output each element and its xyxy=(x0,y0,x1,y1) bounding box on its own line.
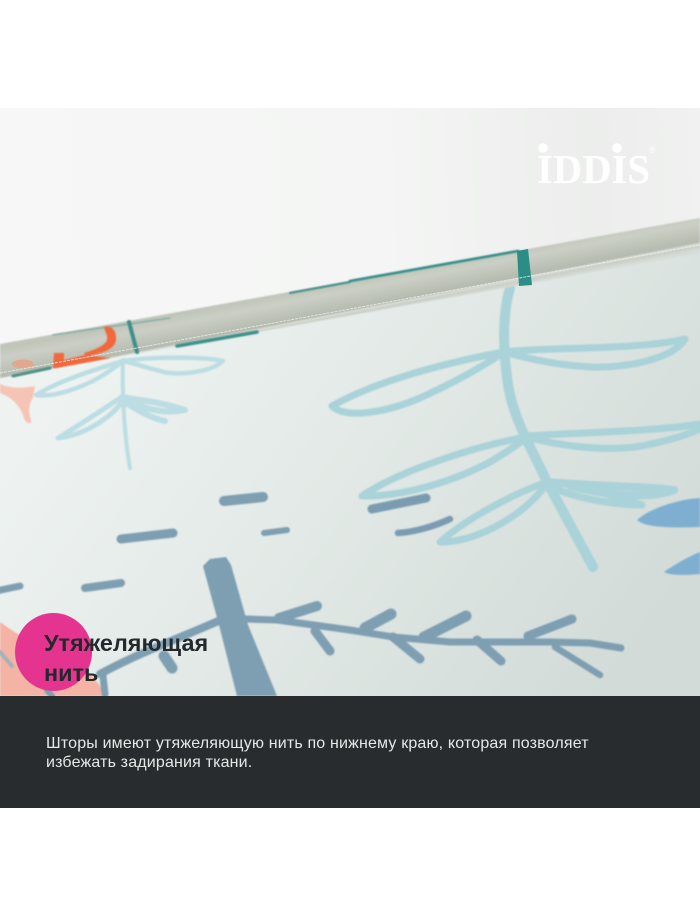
right branch xyxy=(245,606,621,675)
dashes xyxy=(0,497,450,591)
small sprig xyxy=(36,358,223,468)
left branch xyxy=(0,618,225,696)
wall background xyxy=(0,108,700,696)
teal edge stripes xyxy=(13,251,518,376)
large sprig xyxy=(332,288,700,567)
hem roll xyxy=(0,218,700,378)
description band xyxy=(0,696,700,808)
peach flower shape xyxy=(0,384,700,696)
peach spot xyxy=(12,360,34,368)
curtain fabric xyxy=(0,245,700,696)
dark blue tree and dashes xyxy=(0,497,621,696)
IDDIS logo: IDDIS xyxy=(537,146,650,192)
description text xyxy=(46,735,589,771)
stitch line xyxy=(0,245,700,373)
heading xyxy=(44,630,208,686)
description text: избежать задирания ткани. xyxy=(46,754,252,771)
orange motif xyxy=(53,326,116,368)
photo: curtain fabric with weighted hem xyxy=(0,108,700,696)
description text: Шторы имеют утяжеляющую нить по нижнему краю, которая позволяет xyxy=(46,735,589,752)
IDDIS logo: ® xyxy=(649,145,656,155)
heading: нить xyxy=(44,660,98,686)
hem with stitch xyxy=(0,218,700,378)
heading: Утяжеляющая xyxy=(44,630,208,656)
blue blobs at right edge xyxy=(637,498,700,527)
pink petal behind badge xyxy=(0,622,107,696)
teal vertical band xyxy=(517,249,532,286)
magenta circle xyxy=(15,613,92,691)
callout: heading with magenta circle xyxy=(15,613,208,691)
pale teal sprigs xyxy=(36,288,700,567)
tree trunk xyxy=(203,557,277,696)
